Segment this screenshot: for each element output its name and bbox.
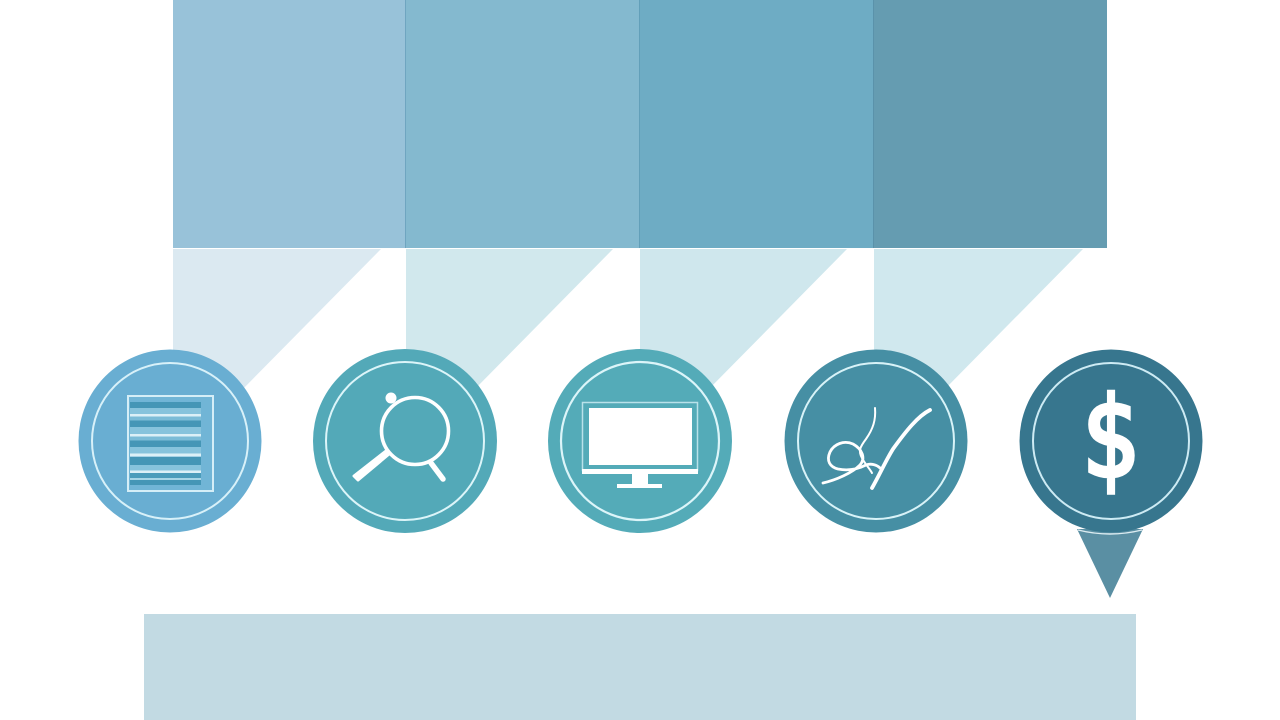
connector 4	[874, 249, 1083, 392]
block 4	[874, 0, 1107, 248]
step 3: monitor icon badge	[548, 349, 732, 533]
icon: document	[128, 396, 213, 491]
icon: monitor	[582, 402, 698, 488]
panel: top colour blocks	[173, 0, 1107, 248]
panel: light connector shadows	[173, 249, 1083, 392]
step 4: signature icon badge	[784, 350, 968, 532]
connector 1	[173, 249, 381, 392]
step 1: document icon badge	[78, 350, 262, 532]
icon: dollar sign: $	[1083, 373, 1140, 502]
block 1	[173, 0, 405, 248]
bottom panel	[144, 614, 1136, 720]
connector 3	[640, 249, 847, 392]
connector 2	[406, 249, 613, 392]
pin pointer	[1077, 529, 1143, 598]
icon: magnifying glass	[354, 392, 448, 480]
block 2	[405, 0, 640, 248]
icon: signature	[823, 408, 930, 488]
step 2: magnifier icon badge	[313, 349, 497, 533]
block 3	[640, 0, 874, 248]
step 5: dollar pin badge	[1020, 350, 1202, 598]
